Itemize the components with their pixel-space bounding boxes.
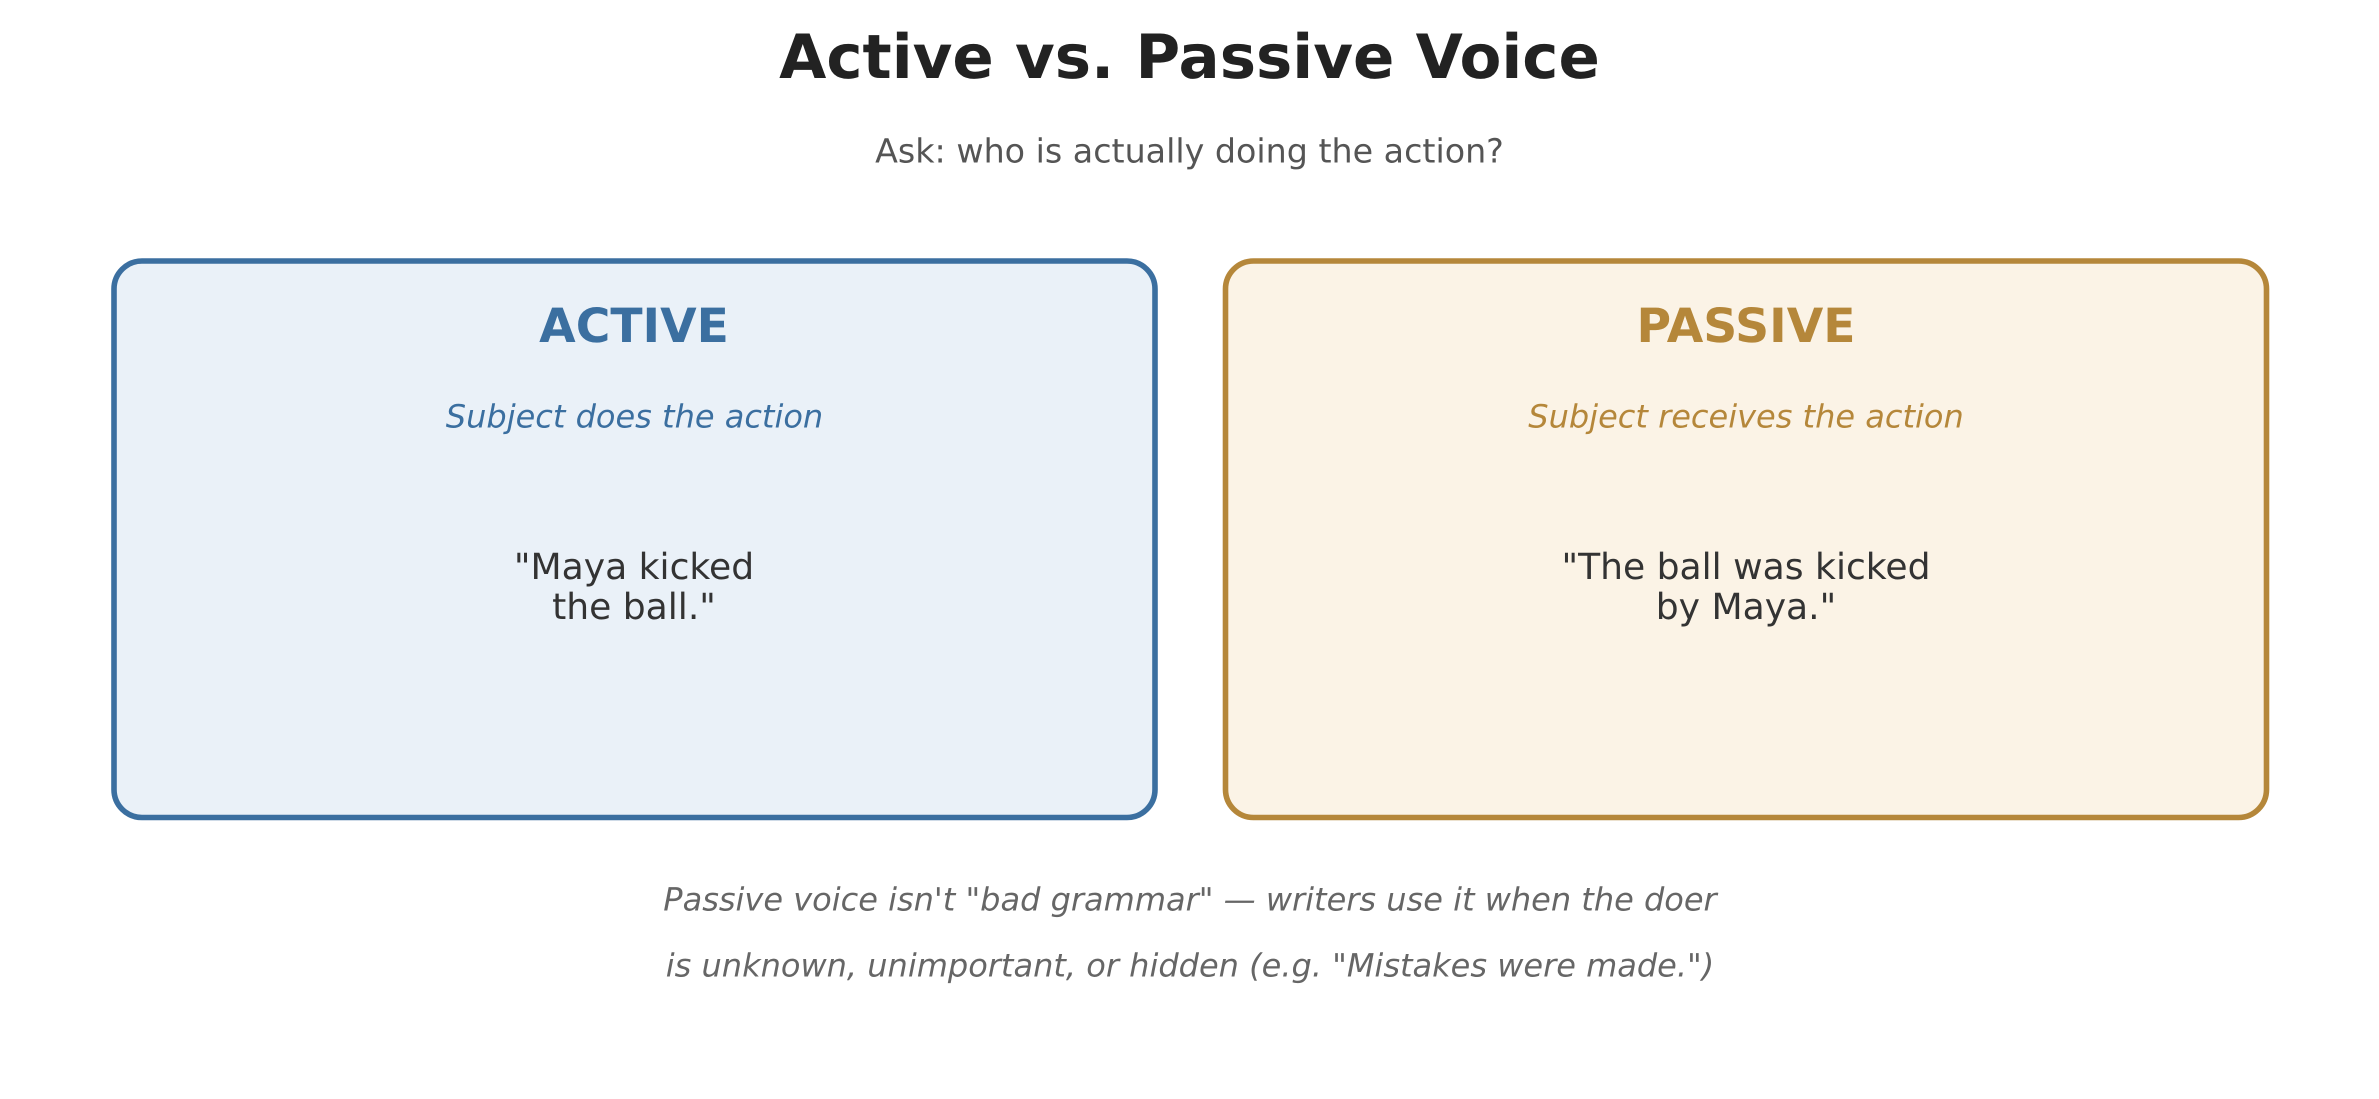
passive definition: Subject receives the action — [1528, 398, 1964, 436]
footnote: Passive voice isn't "bad grammar" — writers use it when the doer — [663, 880, 1719, 918]
passive example sentence: "The ball was kicked — [1561, 546, 1931, 588]
title: Active vs. Passive Voice — [779, 22, 1600, 93]
passive panel box — [1226, 261, 2266, 818]
active heading: ACTIVE — [539, 299, 729, 354]
footnote — [663, 880, 1719, 984]
active definition: Subject does the action — [446, 398, 823, 436]
passive heading: PASSIVE — [1637, 299, 1855, 354]
panel: active — [114, 261, 1155, 818]
panel: passive — [1226, 261, 2266, 818]
active example sentence: the ball." — [552, 586, 716, 628]
active panel box — [114, 261, 1155, 818]
active example sentence — [514, 546, 754, 628]
passive example sentence — [1561, 546, 1931, 628]
passive example sentence: by Maya." — [1656, 586, 1836, 628]
subtitle: Ask: who is actually doing the action? — [875, 132, 1504, 170]
footnote: is unknown, unimportant, or hidden (e.g. "Mistakes were made.") — [666, 946, 1714, 984]
active example sentence: "Maya kicked — [514, 546, 754, 588]
